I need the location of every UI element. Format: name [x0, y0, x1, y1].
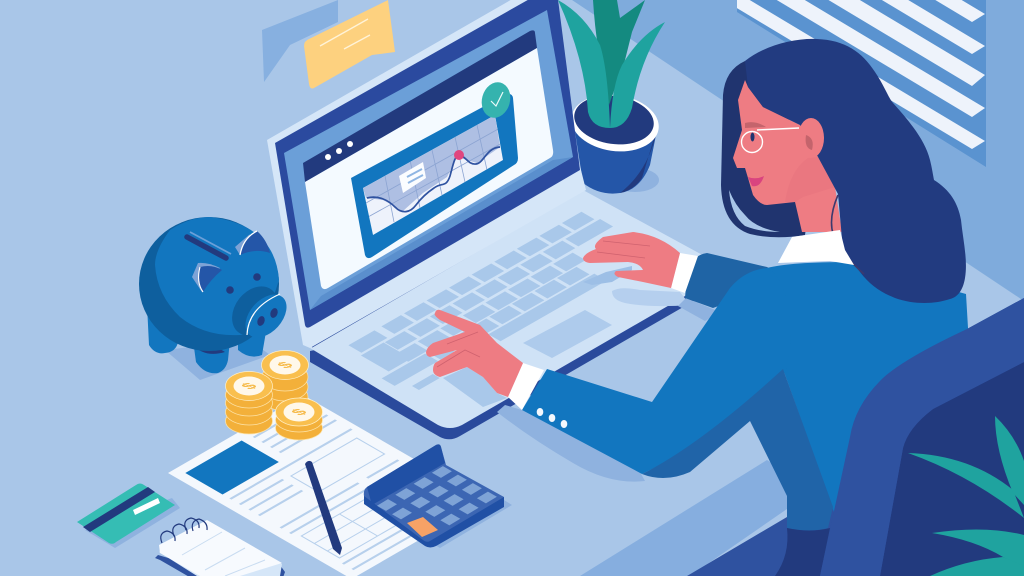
near hand [426, 310, 523, 397]
pig ears [235, 234, 250, 255]
pig coin slot [187, 237, 226, 258]
pen [305, 461, 342, 555]
desk front edge [580, 460, 800, 576]
floor [687, 490, 840, 576]
screen browser bar [303, 30, 537, 182]
trousers [775, 528, 830, 576]
notebook [155, 518, 285, 576]
sleeve buttons [537, 408, 567, 428]
chair back outer [820, 298, 1024, 576]
plant pot shadow [611, 168, 659, 192]
far hand shadow [612, 288, 690, 306]
face shade [785, 157, 835, 202]
ear [798, 118, 824, 158]
lips [748, 176, 764, 186]
near hand shadow on laptop [443, 367, 507, 407]
notebook spiral [161, 518, 207, 543]
calculator [364, 444, 512, 548]
document text lines [189, 405, 474, 570]
coin stack: left: $ [237, 381, 262, 392]
coin stack: left [226, 372, 272, 434]
chart panel [351, 94, 518, 258]
plant leaves [558, 0, 665, 128]
coin stack: back [262, 350, 308, 411]
coin stack: back: $ [273, 360, 298, 371]
document [168, 395, 487, 576]
document image block [185, 440, 279, 494]
collar [778, 230, 854, 265]
screen page [305, 48, 553, 289]
floor plant leaves [908, 416, 1024, 576]
far hand [583, 232, 680, 288]
calculator display [367, 444, 445, 505]
window with blinds [737, 0, 986, 167]
chair inner back [880, 362, 1024, 576]
near arm [522, 268, 791, 474]
trackpad [523, 310, 612, 358]
far hand key shadow [583, 266, 632, 285]
sticky note: yellow [304, 0, 395, 88]
far sleeve [685, 253, 790, 308]
hair gap [729, 190, 780, 232]
calculator orange key [407, 517, 438, 537]
hair main [745, 39, 966, 303]
jacket body [740, 262, 969, 515]
pig snout [223, 277, 287, 345]
sleeve shadow on desk [678, 298, 720, 321]
browser dots [325, 141, 353, 160]
eyebrow [745, 122, 766, 128]
eye [750, 132, 754, 142]
coin stack: front: $ [287, 407, 312, 418]
neck and face [733, 80, 842, 232]
line chart [363, 115, 503, 235]
laptop screen [267, 0, 586, 348]
loose strand [832, 195, 864, 274]
calculator keys [377, 466, 497, 536]
near cuff [508, 363, 544, 410]
check badge [478, 79, 514, 121]
pig eyes [226, 286, 234, 294]
chair back front [820, 298, 1024, 576]
plant pot [568, 89, 662, 194]
piggy bank [139, 217, 295, 373]
far cuff [671, 253, 698, 293]
keyboard keys [336, 210, 658, 395]
hair back [721, 61, 815, 237]
woman [426, 39, 969, 576]
back wall [572, 0, 1024, 301]
coin stack: front [276, 398, 322, 440]
arm shadow on desk [497, 405, 645, 482]
jacket shadow [642, 369, 833, 530]
laptop base [310, 190, 730, 439]
sticky note: blue [262, 0, 338, 82]
glasses [742, 128, 799, 152]
piggy bank shadow [165, 340, 270, 380]
credit card [77, 484, 180, 548]
